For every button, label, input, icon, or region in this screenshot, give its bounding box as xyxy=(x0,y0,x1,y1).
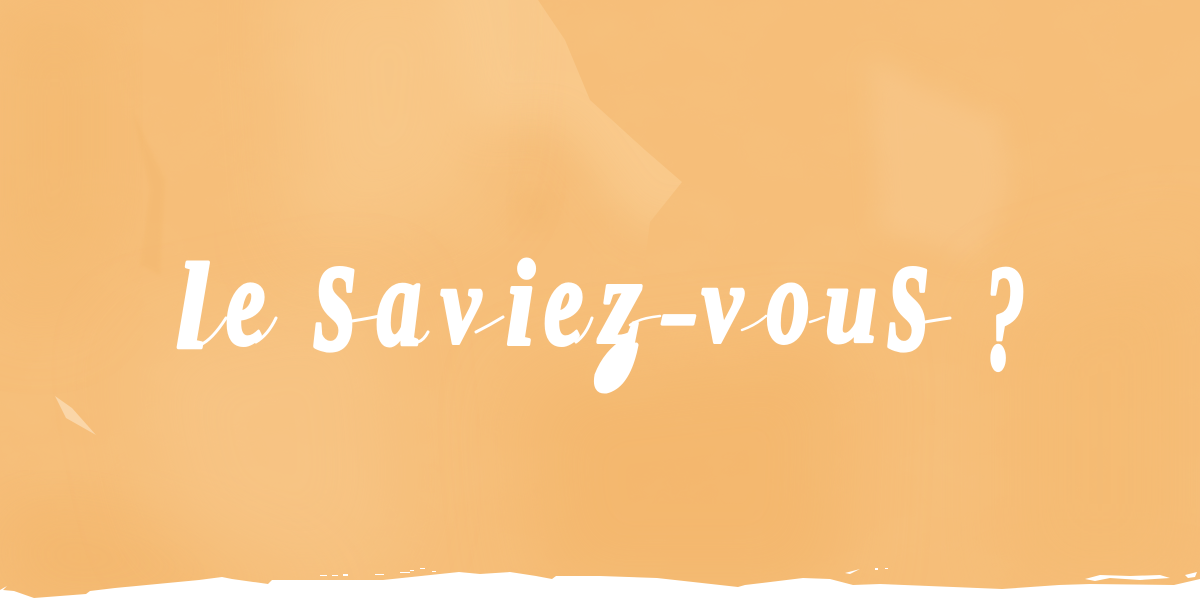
title: o xyxy=(767,233,810,369)
title xyxy=(176,195,1025,401)
title: a xyxy=(377,232,421,372)
title: e xyxy=(544,232,583,372)
title: s xyxy=(314,195,356,386)
title: v xyxy=(702,243,743,365)
title: e xyxy=(226,232,265,372)
title: - xyxy=(660,257,699,365)
title: v xyxy=(441,243,482,366)
title: u xyxy=(825,244,877,366)
title: z xyxy=(597,234,641,369)
title: s xyxy=(888,196,929,387)
title: ? xyxy=(984,235,1025,401)
title: i xyxy=(506,236,535,371)
calligraphic flourishes xyxy=(200,316,950,391)
light paper fleck xyxy=(55,396,96,435)
title: l xyxy=(176,238,208,374)
torn white bottom edge xyxy=(0,568,1200,600)
